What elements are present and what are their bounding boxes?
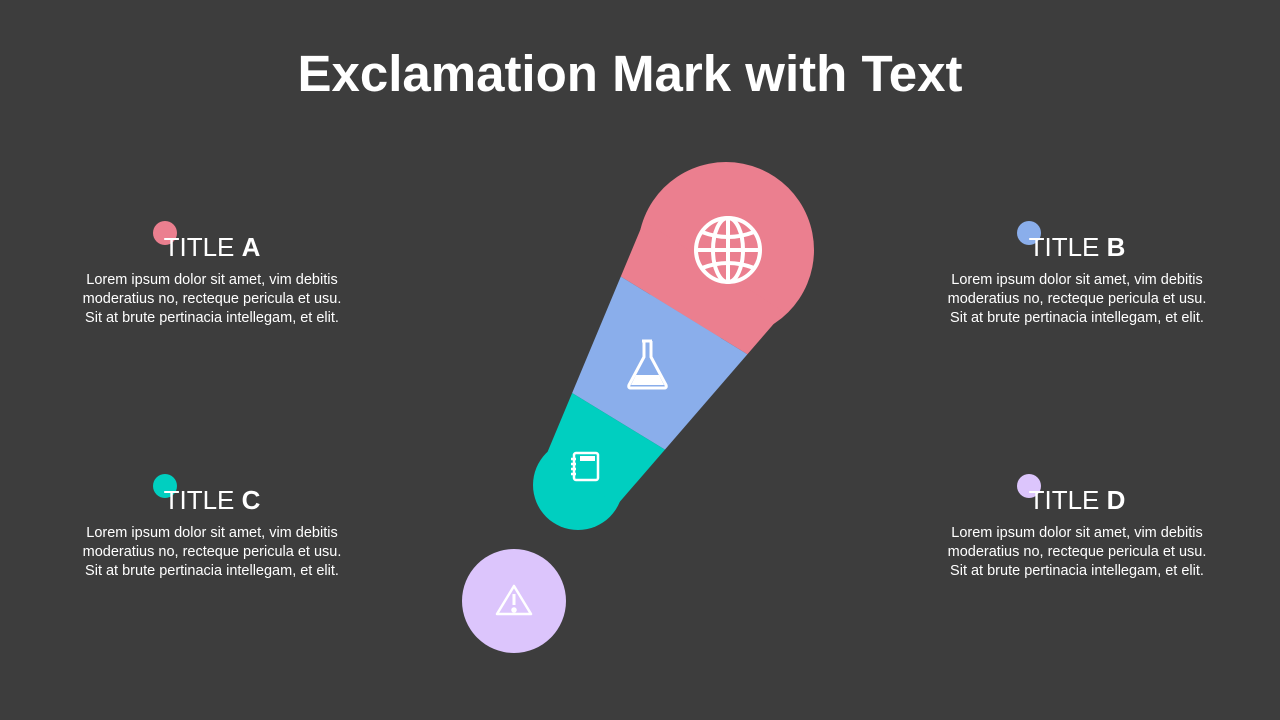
- dot A: [153, 221, 177, 245]
- text block A: Lorem ipsum dolor sit amet, vim debitis: [86, 272, 338, 288]
- text block A: TITLE A: [164, 232, 260, 262]
- icon: notebook: [571, 453, 598, 480]
- text block B: TITLE B: [1029, 232, 1125, 262]
- text block A: Sit at brute pertinacia intellegam, et elit.: [85, 310, 339, 326]
- dot purple: [462, 549, 566, 653]
- text block D: moderatius no, recteque pericula et usu.: [948, 544, 1206, 560]
- stem segment blue: [572, 276, 748, 450]
- text block C: Lorem ipsum dolor sit amet, vim debitis: [86, 525, 338, 541]
- text block D: Sit at brute pertinacia intellegam, et elit.: [950, 563, 1204, 579]
- text block D: Lorem ipsum dolor sit amet, vim debitis: [951, 525, 1203, 541]
- text block A: [83, 232, 341, 326]
- text block A: moderatius no, recteque pericula et usu.: [83, 291, 341, 307]
- text block C: Sit at brute pertinacia intellegam, et elit.: [85, 563, 339, 579]
- text block D: [948, 485, 1206, 579]
- icon: flask: [629, 341, 666, 388]
- stem segment pink: [620, 162, 814, 354]
- icon: globe: [696, 218, 760, 282]
- text block B: moderatius no, recteque pericula et usu.: [948, 291, 1206, 307]
- text block C: [83, 485, 341, 579]
- text block D: TITLE D: [1029, 485, 1125, 515]
- dot B: [1017, 221, 1041, 245]
- icon: warning: [497, 586, 531, 614]
- text block B: [948, 232, 1206, 326]
- text block B: Sit at brute pertinacia intellegam, et elit.: [950, 310, 1204, 326]
- dot D: [1017, 474, 1041, 498]
- text block B: Lorem ipsum dolor sit amet, vim debitis: [951, 272, 1203, 288]
- text block C: TITLE C: [164, 485, 260, 515]
- title: Exclamation Mark with Text: [297, 45, 963, 102]
- dot C: [153, 474, 177, 498]
- text block C: moderatius no, recteque pericula et usu.: [83, 544, 341, 560]
- stem segment teal: [533, 393, 665, 530]
- exclamation mark graphic: [462, 162, 814, 653]
